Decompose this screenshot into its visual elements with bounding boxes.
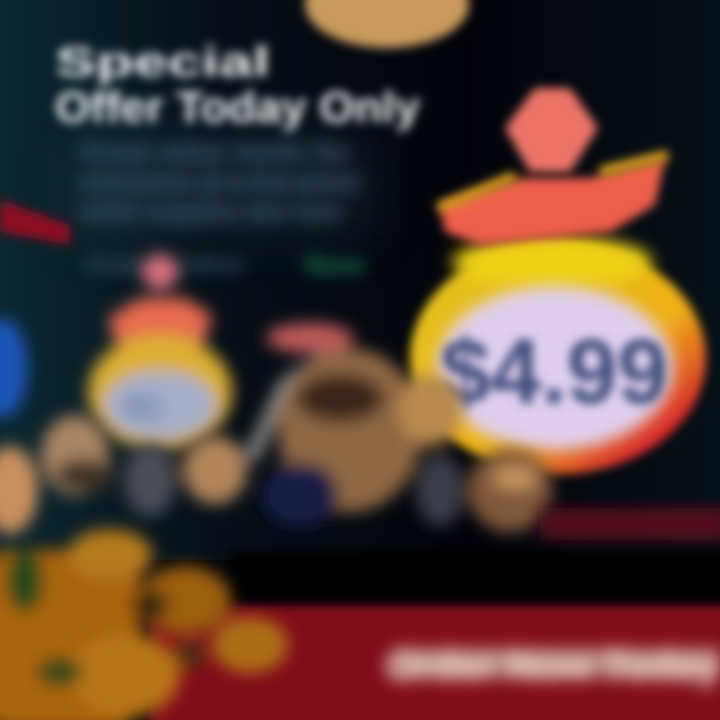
green highlight text: Now: [305, 250, 366, 280]
red floor: [150, 606, 720, 720]
red banner left: [0, 200, 70, 245]
body text: Great value meals for: [80, 136, 350, 166]
body text: Order online: [85, 255, 245, 277]
black band: [230, 550, 720, 600]
body text: [79, 136, 360, 277]
large jar icon: [410, 88, 706, 474]
coin at top: [305, 0, 469, 48]
body text: while supplies last now: [79, 196, 341, 226]
price on jar: $4.99: [440, 321, 668, 423]
title: Special: [55, 38, 270, 85]
background: [0, 0, 720, 560]
blue badge left: [0, 318, 28, 418]
title: Offer Today Only: [55, 83, 421, 132]
body text: everyone at a low price: [80, 166, 360, 196]
fried food pile: [0, 529, 288, 720]
title: [55, 38, 421, 132]
small jar icon: $1: [125, 388, 163, 426]
small jar icon: [88, 254, 232, 450]
counter edge: [540, 508, 720, 540]
nuggets row: [0, 323, 552, 534]
